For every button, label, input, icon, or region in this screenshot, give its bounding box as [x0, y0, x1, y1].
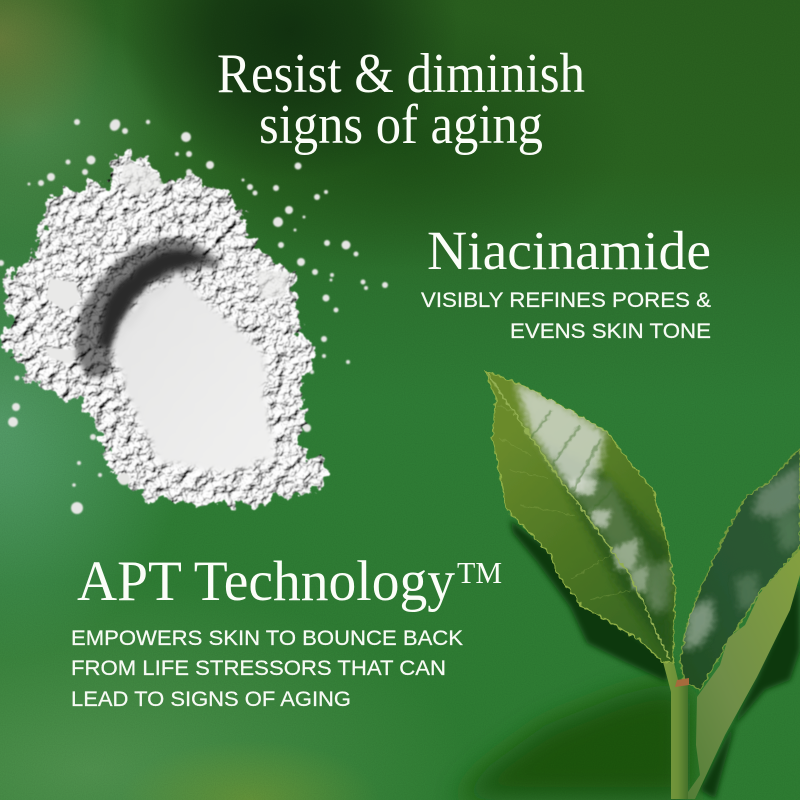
dark veining through gloss	[530, 410, 612, 512]
description: VISIBLY REFINES PORES &	[421, 288, 711, 312]
description	[421, 288, 711, 343]
front folded olive leaf	[683, 550, 800, 799]
midrib and veins	[487, 373, 670, 660]
heading: APT Technology	[77, 550, 455, 613]
bottom diagonal dark shade	[455, 682, 690, 800]
heading: Niacinamide	[427, 220, 711, 281]
description: EVENS SKIN TONE	[510, 319, 711, 343]
leaf shadows on the backdrop	[510, 520, 800, 799]
glossy highlights	[684, 465, 800, 650]
dark crescent shadow	[99, 250, 208, 350]
main large leaf	[485, 371, 675, 663]
callout: APT Technology	[71, 550, 502, 711]
powder pile	[0, 117, 388, 514]
description	[71, 626, 464, 711]
tea leaf stem and leaves	[485, 371, 800, 799]
title	[217, 43, 585, 156]
chunk highlights	[45, 160, 290, 364]
soft sheen along the midrib	[565, 480, 660, 620]
powder mass with crumbly texture	[0, 147, 330, 507]
title: Resist & diminish	[217, 43, 585, 105]
description: FROM LIFE STRESSORS THAT CAN	[71, 656, 446, 680]
scattered powder particles	[0, 117, 388, 514]
dark right half	[540, 440, 672, 660]
gloss highlights	[515, 382, 605, 492]
description: LEAD TO SIGNS OF AGING	[71, 687, 351, 711]
title: signs of aging	[259, 94, 543, 156]
callout: Niacinamide	[421, 220, 711, 343]
crescent outer striations	[76, 238, 222, 378]
heading: TM	[457, 555, 502, 590]
right dark glossy leaf	[680, 448, 800, 690]
pressed smooth centre	[110, 272, 277, 473]
description: EMPOWERS SKIN TO BOUNCE BACK	[71, 626, 464, 650]
stem	[663, 662, 689, 799]
